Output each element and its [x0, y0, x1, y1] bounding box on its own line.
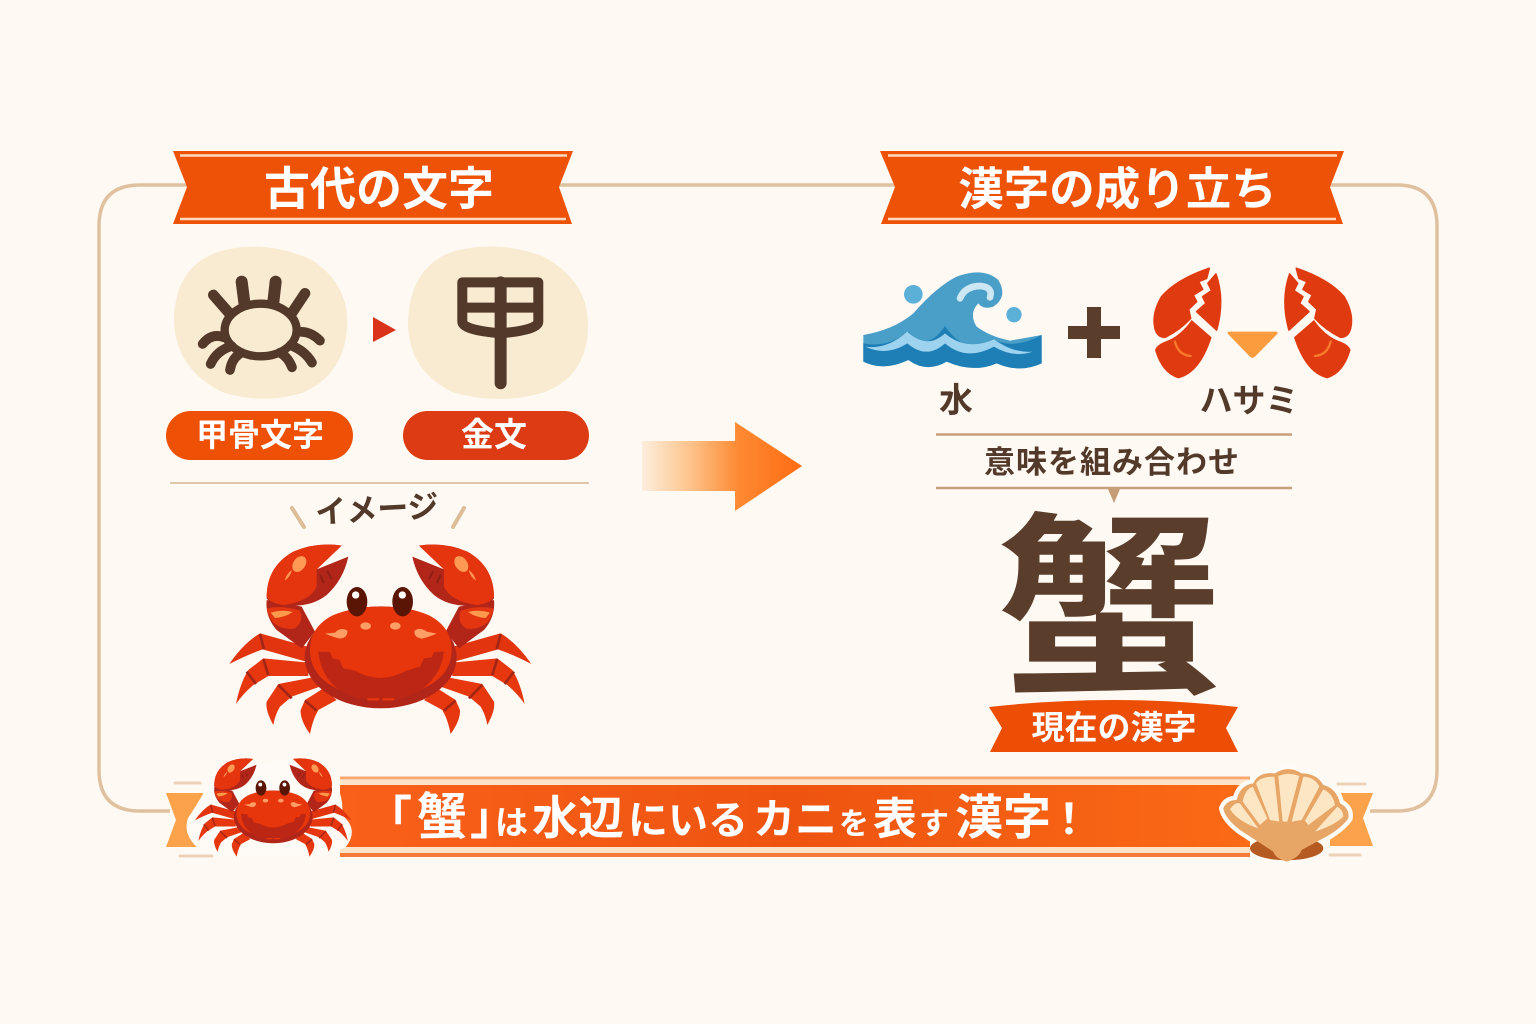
heading banner: 漢字の成り立ち — [880, 151, 1344, 224]
bottom banner — [166, 758, 1373, 862]
panel: outer frame — [99, 185, 1437, 811]
heading banner: 古代の文字 — [173, 151, 573, 224]
ribbon: 現在の漢字: 現在の漢字 — [1032, 709, 1196, 746]
heading banner: 古代の文字: 古代の文字 — [264, 163, 494, 215]
banner message: は — [495, 804, 528, 841]
combine meaning caption: 意味を組み合わせ — [984, 445, 1240, 480]
ribbon: 現在の漢字 — [989, 700, 1238, 752]
ribbon tail right — [1330, 793, 1373, 846]
label: ハサミ: ハサミ — [1200, 382, 1298, 419]
label pill: 甲骨文字 — [166, 411, 353, 460]
banner message: カニ — [753, 796, 837, 843]
banner message: ！ — [1048, 796, 1090, 843]
banner message: 「 — [366, 792, 412, 844]
banner message: を — [839, 808, 869, 841]
ribbon tail left — [166, 793, 205, 847]
banner message: 漢字 — [955, 792, 1051, 845]
modern kanji: 蟹 — [997, 501, 1223, 718]
icon: seashell — [1223, 769, 1349, 862]
panel: kanji formation — [863, 151, 1351, 752]
banner message: 表 — [873, 795, 917, 844]
arrow: ancient to modern — [642, 422, 802, 511]
banner message: す — [919, 808, 949, 841]
label pill: 金文 — [403, 411, 589, 460]
icon: water wave — [863, 272, 1042, 368]
decorative dashes — [175, 783, 1365, 856]
label: 水: 水 — [939, 382, 973, 420]
banner message: 水辺 — [532, 792, 624, 844]
heading banner: 漢字の成り立ち: 漢字の成り立ち — [958, 164, 1277, 215]
oracle bone crab glyph — [174, 247, 347, 399]
panel: ancient characters — [166, 151, 589, 734]
label pill: 甲骨文字: 甲骨文字 — [196, 417, 324, 453]
icon: crab pincers — [1154, 268, 1351, 378]
label pill: 金文: 金文 — [461, 416, 527, 453]
bronze inscription glyph — [408, 247, 588, 399]
banner message: 蟹 — [417, 789, 467, 845]
image label: イメージ — [314, 489, 440, 530]
banner message: 」 — [470, 792, 516, 844]
plus sign — [1068, 307, 1120, 358]
illustration: large crab — [229, 545, 531, 734]
combine meaning caption — [936, 434, 1292, 503]
ribbon bar — [340, 778, 1250, 857]
arrow: oracle to bronze — [373, 317, 396, 342]
banner message: にいる — [628, 799, 748, 843]
crab sticker — [186, 758, 352, 857]
